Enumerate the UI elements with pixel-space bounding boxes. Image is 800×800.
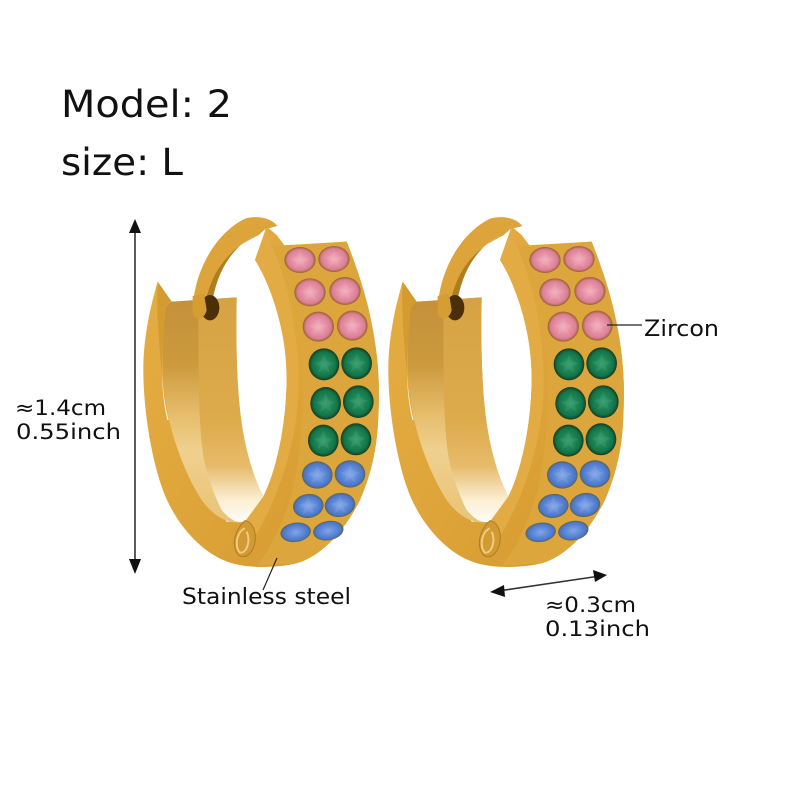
earring right	[388, 217, 624, 567]
width label: ≈0.3cm	[545, 593, 636, 617]
earring left	[143, 217, 379, 567]
stainless steel label: Stainless steel	[182, 585, 351, 610]
title: model: Model: 2	[61, 83, 232, 126]
height label	[15, 396, 121, 444]
zircon leader line	[607, 324, 642, 326]
width arrow	[490, 570, 607, 597]
width label: 0.13inch	[545, 617, 650, 641]
width label	[545, 593, 650, 641]
stainless steel leader line	[263, 558, 277, 590]
height label: 0.55inch	[16, 420, 121, 444]
title: size: size: L	[61, 141, 183, 184]
height label: ≈1.4cm	[15, 396, 106, 420]
height arrow	[129, 219, 141, 574]
zircon label: Zircon	[644, 317, 719, 342]
